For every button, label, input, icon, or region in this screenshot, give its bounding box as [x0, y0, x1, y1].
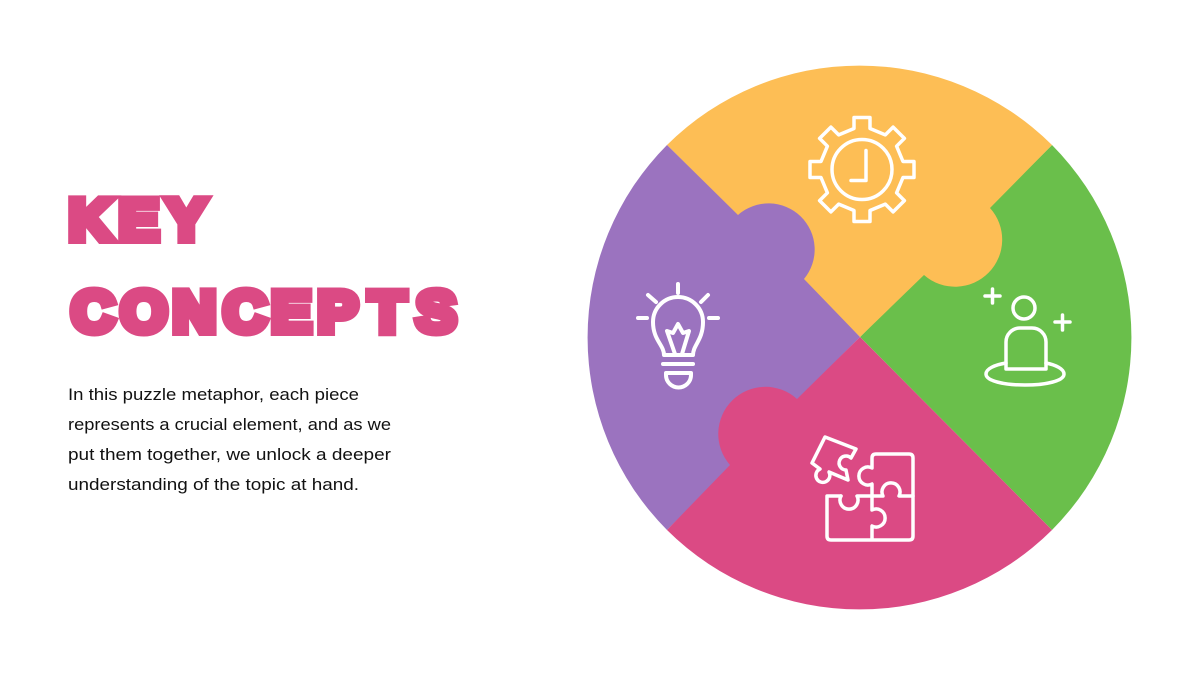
puzzle piece: yellow: [667, 66, 1052, 337]
puzzle piece: purple: [588, 145, 860, 530]
icon: puzzle pieces: [812, 437, 913, 540]
icon: gear with clock: [810, 118, 914, 222]
title: key concepts: [69, 189, 456, 344]
puzzle piece: green: [860, 145, 1131, 530]
body text block: In this puzzle metaphor, each piece: [68, 385, 359, 404]
puzzle piece: pink: [667, 337, 1052, 609]
body text block: [68, 385, 391, 494]
icon: person on platform: [985, 289, 1070, 385]
puzzle circle diagram: [588, 66, 1131, 609]
icon: light bulb: [638, 284, 718, 388]
title: key concepts: KEY: [69, 189, 206, 252]
body text block: understanding of the topic at hand.: [68, 475, 359, 494]
body text block: represents a crucial element, and as we: [68, 415, 391, 434]
body text block: put them together, we unlock a deeper: [68, 445, 391, 464]
title: key concepts: CONCEPTS: [71, 281, 456, 344]
